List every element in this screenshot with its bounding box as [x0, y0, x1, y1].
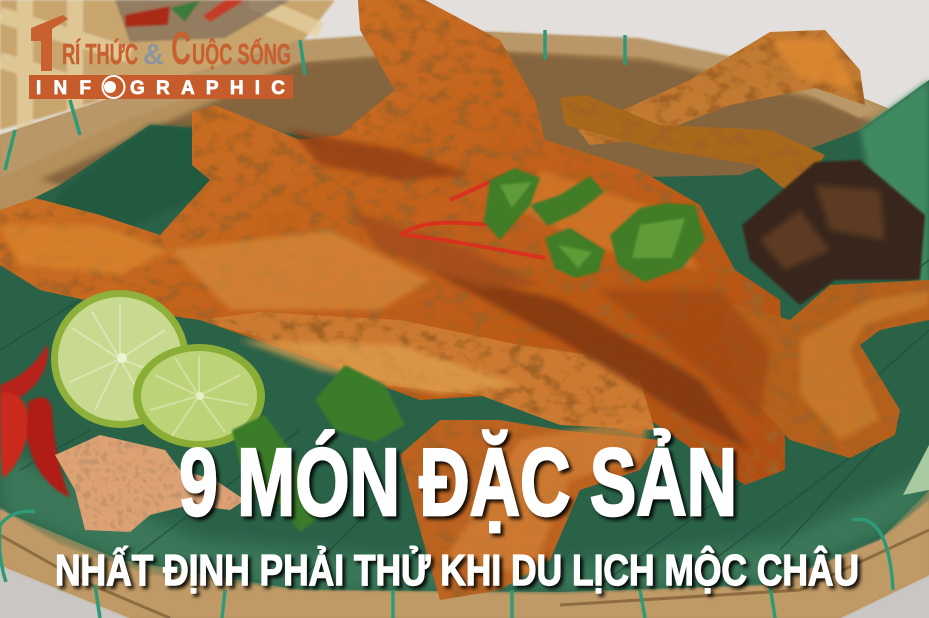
lime right [133, 344, 265, 448]
logo: UỘC SỐNG [192, 37, 291, 71]
small legs top right [578, 30, 865, 145]
basket inner weave [40, 50, 880, 220]
logo emblem T [31, 15, 68, 71]
cilantro on duck [484, 168, 705, 282]
main body [0, 0, 785, 485]
fried shallot pile [55, 435, 245, 532]
basket rim bottom [0, 500, 929, 618]
cilantro on leaf [232, 365, 405, 532]
bamboo tray top left [0, 0, 335, 130]
lime left [51, 290, 189, 428]
logo: & [143, 39, 164, 71]
infographic bar [29, 75, 293, 99]
logo: C [171, 22, 191, 74]
logo text: RÍ THỨC [62, 37, 138, 71]
title: 9 MÓN ĐẶC SẢN [179, 428, 737, 536]
logo: GRAPHIC [130, 78, 285, 99]
chilli strips [400, 175, 545, 258]
logo [29, 15, 293, 99]
lower piece [400, 420, 660, 600]
chillies [0, 345, 70, 497]
dark liver [742, 160, 925, 305]
logo: INF [36, 78, 91, 99]
wing right [720, 280, 929, 458]
